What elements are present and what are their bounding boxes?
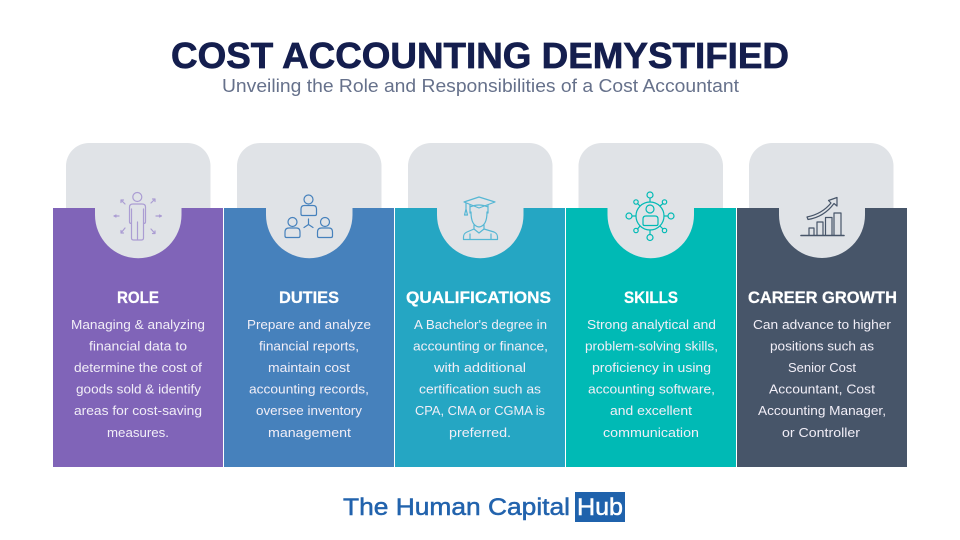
text: career growth description: Can advance to higher [753,318,891,332]
heading: role: ROLE [117,288,159,307]
colour block: role [53,208,223,467]
tab: skills [578,143,723,258]
tab: role [66,143,210,258]
text: role description: goods sold & identify [76,382,202,396]
text: skills description: communication [603,426,699,440]
text: career growth description: Accountant, Cost [769,382,876,396]
text: duties description: oversee inventory [256,404,363,418]
text: skills description: problem-solving skills, [585,340,718,354]
text: skills description: Strong analytical and [587,318,716,332]
title: COST ACCOUNTING DEMYSTIFIED [171,35,789,76]
text: career growth description [753,318,891,440]
text: duties description [247,318,371,440]
text: skills description: accounting software, [588,382,715,396]
panel: role [53,143,223,467]
icon: person with arrows [114,192,162,240]
text: qualifications description: with additional [433,361,526,375]
heading: qualifications: QUALIFICATIONS [406,288,551,307]
subtitle: Unveiling the Role and Responsibilities of a Cost Accountant [222,76,739,96]
colour block: skills [566,208,736,467]
text: duties description: maintain cost [268,361,351,375]
heading: duties: DUTIES [279,288,339,307]
text: role description: financial data to [89,340,187,354]
text: qualifications description: CPA, CMA or CGMA is [415,404,545,418]
icon: growth chart [801,198,844,236]
text: qualifications description: A Bachelor's degree in [414,318,547,332]
colour block: qualifications [395,208,565,467]
logo wordmark: The Human Capital [343,494,570,521]
text: skills description [585,318,718,440]
text: career growth description: or Controller [782,426,860,440]
text: role description: Managing & analyzing [71,318,205,332]
tab: career growth [749,143,894,258]
tab: qualifications [408,143,552,258]
text: career growth description: Senior Cost [788,361,857,375]
heading: skills: SKILLS [624,288,678,307]
text: duties description: Prepare and analyze [247,318,371,332]
text: duties description: accounting records, [249,382,369,396]
text: qualifications description: accounting or finance, [413,340,548,354]
text: role description: measures. [107,426,169,440]
panel: skills [566,143,736,467]
text: qualifications description: certification such as [419,382,541,396]
text: career growth description: positions such as [770,340,874,354]
text: duties description: management [268,426,352,440]
tab: duties [237,143,382,258]
text: qualifications description: preferred. [449,426,511,440]
text: role description [71,318,205,440]
text: qualifications description [413,318,548,440]
icon: team [285,195,332,238]
text: career growth description: Accounting Manager, [758,404,886,418]
colour block: career growth [737,208,907,467]
icon: network person [626,192,674,240]
heading: career growth: CAREER GROWTH [748,288,897,307]
text: skills description: and excellent [610,404,693,418]
logo badge: Hub [577,494,623,521]
panel: career growth [737,143,907,467]
panel: qualifications [395,143,565,467]
text: skills description: proficiency in using [592,361,711,375]
panel: duties [224,143,394,467]
logo [343,492,625,522]
icon: graduate [464,197,498,240]
text: duties description: financial reports, [259,340,359,354]
colour block: duties [224,208,394,467]
text: role description: areas for cost-saving [74,404,202,418]
text: role description: determine the cost of [74,361,203,375]
